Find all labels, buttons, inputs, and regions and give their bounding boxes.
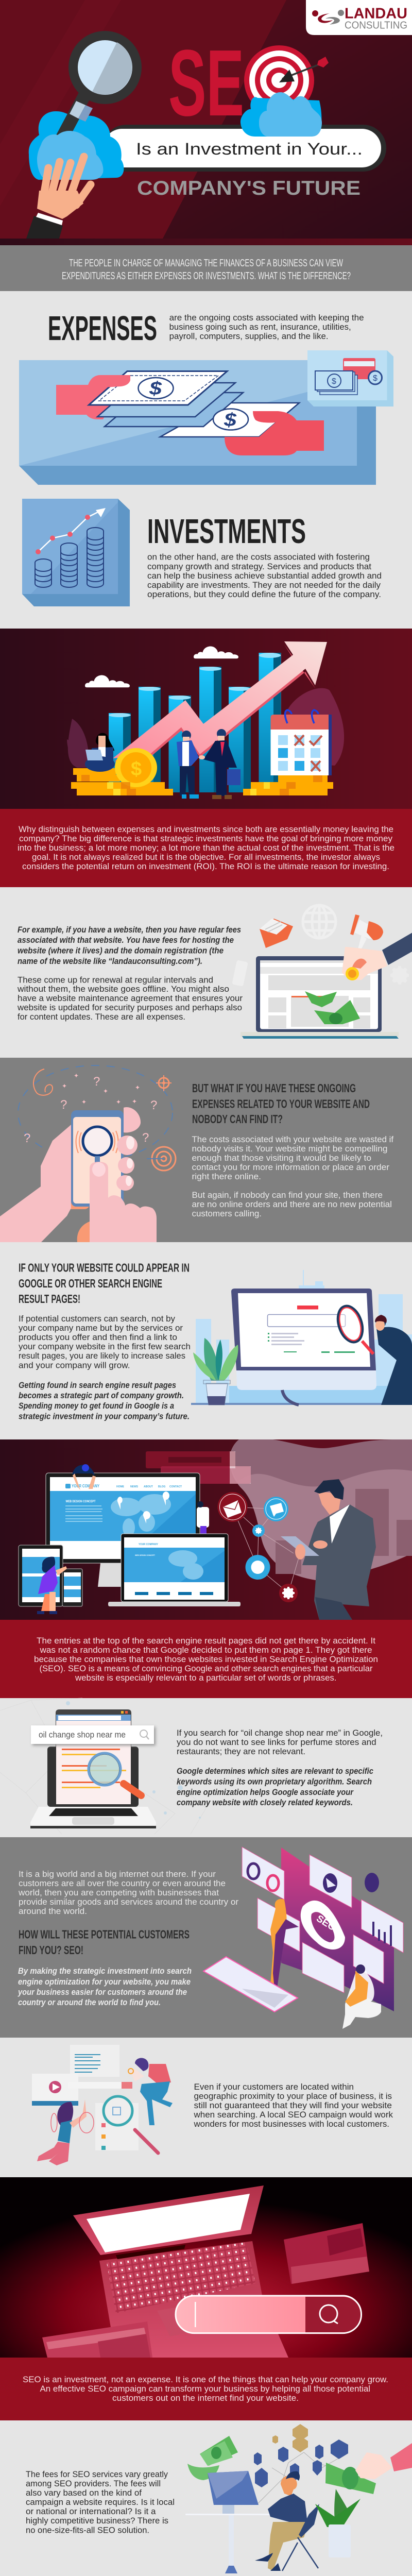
heading: FIND YOU? SEO! [19,1943,83,1957]
illustration: monitor with search, plant and man [191,1270,412,1405]
text: expenses definition: business going such as rent, insurance, utilities, [169,323,351,332]
text: emphasis: keywords using its own proprietary algorithm. Search [177,1777,372,1787]
text: emphasis: associated with that website. You have fees for hosting the [18,936,234,945]
subtitle: Is an Investment in Your... [136,140,363,158]
text block: no one-size-fits-all SEO solution. [26,2526,149,2535]
text block: The entries at the top of the search engine result pages did not get there by accident. It [37,1636,375,1646]
panel: expenses and investments [0,291,412,629]
illustration: desktop monitor [46,1473,200,1587]
text block: The costs associated with your website are wasted if [192,1135,393,1144]
text: emphasis: For example, if you have a website, then you have regular fees [18,925,241,935]
illustration: small card with bills and coin [307,350,393,406]
text block [26,2470,175,2535]
text block: around the world. [19,1907,87,1916]
heading: company's future: COMPANY'S FUTURE [137,177,360,199]
text block: company? The big difference is that strategic investments have the goal of bringing more money [19,834,393,843]
illustration: isometric SEO dashboard [203,1847,403,2029]
background blob and city [230,1439,412,1581]
title: SEO: SE [168,30,244,135]
text block: (SEO). SEO is a means of convincing Google and other search engines that a particular [39,1664,373,1673]
text: emphasis: name of the website like “landauconsulting.com”). [18,957,202,966]
text block: SEO is an investment, not an expense. It is one of the things that can help your company grow. [23,2375,388,2384]
text: investments definition: operations, but they could define the future of the company. [147,590,381,599]
text: emphasis: your business easier for customers around the [18,1988,187,1997]
text: investments definition: on the other hand, are the costs associated with fostering [147,552,370,562]
text block: Even if your customers are located within [194,2082,354,2092]
illustration: tablet, phone and woman [19,1545,82,1614]
panel: entries at the top [0,1620,412,1698]
text block: world, then you are competing with businesses that [18,1888,219,1897]
logo badge [306,0,412,35]
text: renewal [17,976,243,1022]
illustration: coin stacks with growth line [22,499,130,606]
illustration: small card with bills and coin: $ [332,377,336,386]
panel: nobody can find it [0,1058,412,1242]
text: renewal: without them, the website goes offline. You might also [17,985,229,994]
search bar [176,2296,362,2333]
text block: Why distinguish between expenses and investments since both are essentially money leaving the [19,825,393,834]
text: emphasis: Spending money to get found in Google is a [19,1401,174,1411]
heading: investments: INVESTMENTS [147,512,306,551]
illustration: laptop with money [241,933,412,1039]
illustration: decorative search symbols: ✦ [81,1098,87,1106]
illustration: people searching [32,2045,173,2165]
panel: laptop with search bar [0,2177,412,2358]
text block: also vary based on the kind of [26,2488,142,2498]
heading [19,1928,190,1957]
illustration: laptop [108,1534,241,1606]
illustration: laptop [73,2185,288,2358]
panel: hero banner [0,0,412,245]
illustration: decorative search symbols: ? [24,1131,30,1145]
panel: SEO is an investment [0,2358,412,2420]
logo badge: CONSULTING [345,20,407,31]
illustration: decorative search symbols: ✦ [132,1098,137,1105]
illustration: decorative search symbols: ? [150,1098,157,1112]
text: emphasis: Google determines which sites are relevant to specific [177,1767,373,1776]
illustration: two businessmen shaking hands [177,729,241,799]
text: emphasis: engine optimization for your website, you make [18,1977,191,1987]
icon: clouds [85,647,238,687]
text block: If potential customers can search, not by [19,1314,176,1324]
text: expenses definition [169,313,364,341]
text block: result pages, you are likely to increase sales [19,1351,185,1361]
icon: globe [303,905,336,938]
illustration: desktop monitor: BLOG [158,1485,166,1488]
intro text [62,258,351,282]
illustration: decorative search symbols: ✦ [103,1088,108,1095]
illustration: desktop monitor: WEB DESIGN CONCEPT [66,1500,96,1503]
text block: It is a big world and a big internet out there. If your [19,1870,216,1879]
panel: intro question [0,245,412,291]
panel: growth illustration [0,629,412,809]
text block: But again, if nobody can find your site, then there [192,1191,383,1200]
heading: NOBODY CAN FIND IT? [192,1112,283,1126]
text: emphasis: becomes a strategic part of company growth. [19,1391,184,1400]
illustration: laptop: YOUR COMPANY [139,1543,159,1546]
illustration: woman at computer with money [185,2424,412,2573]
illustration: decorative search symbols: ? [60,1098,67,1112]
text: emphasis: By making the strategic investment into search [18,1967,192,1976]
search bar [103,125,386,172]
text block: campaign a website requires. Is it local [26,2498,175,2507]
icon: envelope [260,919,293,948]
text: emphasis [18,1967,192,2007]
icon: calendar [271,710,332,775]
text block [18,1870,239,1916]
text block [177,1728,383,1756]
text block: are no online orders and there are no new potential [192,1200,392,1209]
text block [34,1636,378,1683]
text block: among SEO providers. The fees will [26,2479,161,2488]
text: expenses definition: are the ongoing costs associated with keeping the [169,313,364,323]
icon: phone and gear ghost [232,960,409,987]
text: renewal: These come up for renewal at regular intervals and [18,976,213,985]
text block: If you search for “oil change shop near me” in Google, [177,1728,383,1738]
panel: SEO fees [0,2420,412,2576]
text block: website is especially relevant to a particular set of words or phrases. [75,1673,337,1683]
illustration: decorative search symbols: ✦ [135,1084,140,1091]
text block: wonders for most businesses with local customers. [193,2120,389,2129]
heading: RESULT PAGES! [19,1292,80,1306]
text: investments definition [147,552,382,599]
text block [23,2375,388,2403]
decorative leaves [67,688,344,768]
search phrase: oil change shop near me [39,1730,126,1739]
text: investments definition: can help the business achieve substantial added growth and [147,571,382,581]
text block: customers are all over the country or even around the [19,1879,226,1888]
SEO label on refresh ring: SEO [314,1913,338,1934]
illustration: desktop monitor: HOME [116,1485,125,1488]
icon: megaphone [350,914,383,951]
text: renewal: have a website maintenance agreement that ensures your [18,994,243,1003]
text block: highly competitive business? There is [26,2516,168,2526]
document panels [42,2223,369,2358]
heading: IF ONLY YOUR WEBSITE COULD APPEAR IN [19,1261,190,1275]
illustration: desktop monitor: YOUR COMPANY [72,1484,100,1488]
illustration: decorative search symbols: ✦ [74,1072,79,1079]
illustration: desktop monitor: ABOUT [144,1485,153,1488]
text block: your company name but by the services or [19,1324,183,1333]
network icons [217,1492,301,1602]
heading: HOW WILL THESE POTENTIAL CUSTOMERS [19,1928,190,1941]
bottom strip [0,239,412,245]
text: emphasis: engine optimization helps Google associate your [177,1788,354,1797]
panel: search engine result pages [0,1242,412,1439]
text block: into the business; a lot more money; a lot more than the actual cost of the investment. That is the [18,843,394,853]
illustration: decorative search symbols: ✦ [62,1082,67,1090]
heading [19,1261,190,1306]
text block: when searching. A local SEO campaign would work [193,2110,393,2120]
illustration: hand holding phone with magnifier [0,1107,157,1242]
search result bars [146,1451,251,1484]
text block: goal. It is not always realized but it is the objective. For all investments, the investor always [32,853,380,862]
illustration: decorative search symbols: ? [93,1075,100,1089]
text block: and your company will grow. [19,1361,130,1370]
text: expenses definition: payroll, computers, supplies, and the like. [169,332,329,341]
logo badge: LANDAU [345,5,407,22]
panel: local customers [0,2038,412,2177]
illustration: hands exchanging money [19,360,376,485]
illustration: woman with laptop [85,733,115,772]
text block: customers out on the internet find your website. [112,2394,299,2403]
text: emphasis: website (where it lives) and the domain registration (the [18,946,224,955]
text block: was not a random chance that Google decided to put them on page 1. They got there [39,1646,372,1655]
illustration: laptop search [30,1709,156,1828]
illustration: decorative search symbols: ? [142,1131,149,1145]
illustration: decorative search symbols [18,1065,176,1171]
panel: oil change example [0,1698,412,1837]
bar chart: cylinders [109,653,281,792]
text block: nobody visits it. Your website might be compelling [192,1144,387,1154]
text: emphasis: company website with closely related keywords. [177,1798,353,1807]
icon: coin stacks: $ [131,758,142,780]
arrow: rising trend [113,641,327,761]
text: emphasis: strategic investment in your company’s future. [19,1412,190,1421]
text block: considers the potential return on investment (ROI). The ROI is the ultimate reason for investing. [22,862,389,871]
text: investments definition: company growth and strategy. Services and products that [147,562,371,571]
text block [18,825,394,871]
text block: because the companies that own those websites invested in Search Engine Optimization [34,1655,378,1664]
text block: right there online. [192,1172,261,1181]
text block [19,1314,191,1370]
illustration: desktop monitor: NEWS [130,1485,139,1488]
text block: restaurants; they are not relevant. [177,1747,305,1756]
icon: coin stacks [71,748,333,795]
text block: your company website in the first few search [19,1342,191,1351]
illustration: businessman with tablet [281,1479,376,1620]
text block: or national or international? Is it a [26,2507,156,2516]
panel: why distinguish [0,809,412,887]
icon: target with arrow [244,45,329,115]
illustration: hands exchanging money: $ [149,378,162,399]
text block: The fees for SEO services vary greatly [26,2470,168,2479]
illustration: laptop: WEB DESIGN CONCEPT [135,1554,155,1556]
illustration: hands exchanging money: $ [224,409,237,430]
title: SEO: O [244,29,315,134]
text: emphasis [18,925,241,966]
illustration: decorative search symbols: ✦ [116,1098,121,1106]
panel: website fees [0,887,412,1058]
icon: right clouds [241,92,322,137]
text block: provide similar goods and services around the country or [19,1897,239,1907]
text block: still not guaranteed that they will find your website [194,2101,392,2110]
heading: GOOGLE OR OTHER SEARCH ENGINE [19,1277,162,1290]
icon: magnifier, clouds and hand [26,31,142,239]
heading [192,1081,370,1126]
text: emphasis: Getting found in search engine result pages [19,1381,176,1390]
text block: customers calling. [192,1209,262,1218]
text block: enough that those visiting it would be likely to [192,1154,371,1163]
illustration: desktop monitor: CONTACT [169,1485,182,1488]
text: emphasis [177,1767,373,1807]
text block: you do not want to see links for perfume stores and [177,1738,376,1747]
text: renewal: for content updates. These are all expenses. [18,1012,185,1022]
text: emphasis: country or around the world to find you. [18,1998,161,2007]
text block: geographic proximity to your place of business, it is [194,2092,392,2101]
text block [193,2082,393,2129]
text block: products you offer and then find a link to [19,1333,177,1342]
panel: big world [0,1837,412,2038]
text block: contact you for more information or place an order [192,1163,390,1172]
heading: expenses: EXPENSES [48,309,157,348]
panel: multi-device and SEO network illustration [0,1439,412,1620]
text: investments definition: capability are investments. They are not needed for the daily [147,581,381,590]
illustration: small card with bills and coin: $ [373,374,377,383]
illustration: people around monitor [72,1464,209,1534]
text: emphasis [19,1381,190,1421]
text block [192,1135,393,1218]
text: renewal: website is updated for security purposes and perhaps also [17,1003,242,1012]
text block: An effective SEO campaign can transform your business by helping all those potential [40,2384,370,2394]
